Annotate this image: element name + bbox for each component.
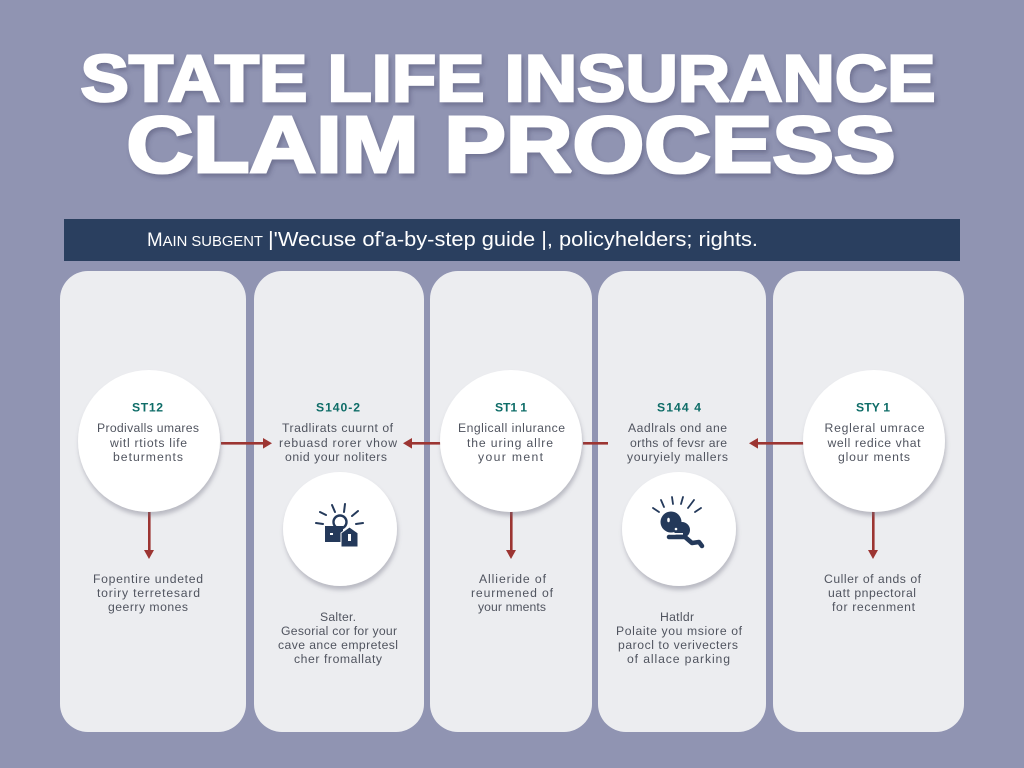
text: step 3 detail	[471, 572, 554, 614]
text: step 2 detail: Gesorial cor for your	[281, 624, 397, 638]
panel: step column 1	[60, 271, 246, 732]
text: step 1 detail	[93, 572, 203, 614]
circle: step 1: Prodivalls umares	[97, 421, 199, 435]
text: step 3 detail: Allieride of	[479, 572, 547, 586]
arrow: step 5 down	[868, 510, 878, 559]
circle: step 3: ST1 1	[495, 400, 527, 414]
text: step 4: S144 4	[657, 400, 701, 414]
circle: step 5: STY 1	[856, 400, 890, 414]
text: step 5 detail	[824, 572, 922, 614]
arrow: step 1 down	[144, 510, 154, 559]
text: step 4 detail	[616, 610, 743, 666]
text: step 4: Aadlrals ond ane	[628, 421, 727, 435]
subtitle banner: |'Wecuse of'a-by-step guide |, policyhelders; rights.	[268, 229, 758, 251]
text: step 3 detail: your nments	[478, 600, 546, 614]
text: step 4: orths of fevsr are	[630, 436, 727, 450]
text: step 5 detail: uatt pnpectoral	[828, 586, 916, 600]
panel: step column 5	[773, 271, 964, 732]
text: step 5 detail: Culler of ands of	[824, 572, 922, 586]
text: step 4 detail: parocl to verivecters	[618, 638, 738, 652]
text: step 4: youryiely mallers	[627, 450, 728, 464]
circle: step 3: Englicall inlurance	[458, 421, 565, 435]
text: step 1 detail: Fopentire undeted	[93, 572, 203, 586]
text: step 4 detail: Hatldr	[660, 610, 694, 624]
panel: step column 2	[254, 271, 424, 732]
text: step 2: Tradlirats cuurnt of	[282, 421, 394, 435]
text: step 2 detail: cher fromallaty	[294, 652, 383, 666]
circle: step 1	[78, 370, 220, 512]
icon circle: key	[622, 472, 736, 586]
panel: step column 4	[598, 271, 766, 732]
text: step 2	[279, 400, 397, 464]
panel: step column 3	[430, 271, 592, 732]
text: step 2 detail: Salter.	[320, 610, 356, 624]
title: CLAIM PROCESS	[126, 100, 895, 189]
text: step 1 detail: geerry mones	[108, 600, 188, 614]
arrow: step 1 to step 2	[221, 438, 272, 449]
text: step 1 detail: toriry terretesard	[97, 586, 200, 600]
circle: step 5: well redice vhat	[826, 436, 921, 450]
text: step 3 detail: reurmened of	[471, 586, 554, 600]
circle: step 3: your ment	[478, 450, 544, 464]
text: step 5 detail: for recenment	[832, 600, 916, 614]
circle: step 1: ST12	[132, 400, 163, 414]
text: step 2: rebuasd rorer vhow	[279, 436, 397, 450]
circle: step 5: Regleral umrace	[824, 421, 925, 435]
text: step 2 detail: cave ance empretesl	[278, 638, 398, 652]
circle: step 5: glour ments	[838, 450, 910, 464]
subtitle banner	[64, 219, 960, 261]
text: step 4	[627, 400, 728, 464]
text: step 2 detail	[278, 610, 398, 666]
arrow: step 3 to step 2	[403, 438, 442, 449]
circle: step 1: beturments	[113, 450, 183, 464]
text: step 4 detail: of allace parking	[627, 652, 730, 666]
text: step 2: S140-2	[316, 400, 360, 414]
text: step 4 detail: Polaite you msiore of	[616, 624, 743, 638]
arrow: step 3 down	[506, 510, 516, 559]
circle: step 5	[803, 370, 945, 512]
connector: step 3 to step 4	[583, 442, 608, 445]
arrow: step 5 to step 4	[749, 438, 804, 449]
circle: step 1: witl rtiots life	[109, 436, 187, 450]
title: STATE LIFE INSURANCE	[80, 41, 936, 115]
text: step 2: onid your noliters	[285, 450, 387, 464]
circle: step 3	[440, 370, 582, 512]
subtitle banner: MAIN SUBGENT	[147, 230, 263, 251]
circle: step 3: the uring allre	[467, 436, 553, 450]
icon circle: locks and tag	[283, 472, 397, 586]
title	[80, 41, 936, 189]
